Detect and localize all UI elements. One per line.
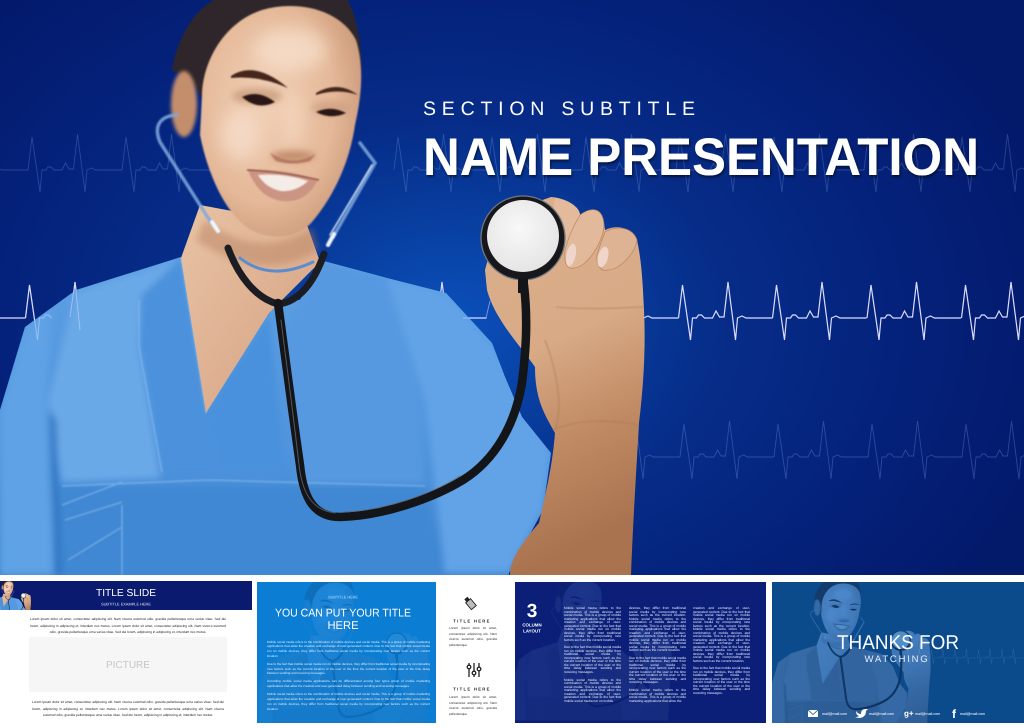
stethoscope: [157, 115, 565, 517]
thumbnail 2 body text: Mobile social media refers to the combination of mobile devices and social media. This is a group of mobile marketing applications that allow the creation and exchange of user-generated content. Due to the fact that mobile social media run on mobile devices, they differ from traditional social media by incorporating new factors such as the current location.: [267, 692, 430, 711]
thanks heading: THANKS FOR: [837, 632, 959, 654]
thumbnail 4 column 3: creation and exchange of user-generated content. Due to the fact that mobile social media run on mobile devices, they differ from traditional social media by incorporating new factors such as the current location. Mobile social media refers to the combination of mobile devices and social media. This is a group of mobile marketing applications that allow the creation and exchange of user-generated content. Due to the fact that mobile social media run on mobile devices, they differ from traditional social media by incorporating new factors such as the current location.: [693, 606, 750, 662]
thumbnail 2 body text: According mobile social media applications can be differentiated among four types group of mobile marketing applications that allow the creation and user-generated delay between sending and receiving messages.: [267, 679, 430, 688]
icon: sliders: [467, 663, 481, 677]
thumbnail 4 column 2: [629, 606, 686, 703]
slide thumbnail 3: icon list: [453, 596, 491, 692]
column layout label: [522, 622, 542, 634]
ECG line overlapping shoulder and sleeve: [26, 282, 490, 340]
slide thumbnail 2: blue title: SUBTITLE HERE: [328, 596, 358, 600]
thumbnail 3 text 2: Lorem ipsum dolor sit amet, consectetur adipiscing elit. Nam viverra euismod odio, gravida pellentesque: [449, 695, 497, 716]
contact row: [808, 707, 985, 721]
thumbnail 4 column 2: Mobile social media refers to the combination of mobile devices and social media. This is a group of mobile marketing applications that allow the: [629, 688, 686, 703]
heading 1: TITLE HERE: [453, 618, 491, 624]
thumbnail 1 upper text: Lorem ipsum dolor sit amet, consectetur adipiscing elit. Nam viverra euismod odio, gravida pellentesque urna varius vitae. Sed dui lorem, adipiscing in adipiscing et, interdum nec metus. Lorem ipsum dolor sit amet, consectetur adipiscing elit. Nam viverra euismod odio, gravida pellentesque urna varius vitae. Sed dui lorem, adipiscing in adipiscing et, interdum nec metus.: [30, 617, 226, 634]
hand and forearm: [485, 197, 645, 575]
fingers: [550, 198, 637, 270]
thumbnail 4 column 1: [564, 606, 622, 703]
picture placeholder: [29, 637, 227, 692]
hero background: [0, 0, 1024, 575]
icon: bottle: [464, 596, 476, 610]
subtitle: SECTION SUBTITLE: [423, 98, 695, 120]
thumbnail 3 text 1: Lorem ipsum dolor sit amet, consectetur adipiscing elit. Nam viverra euismod odio, gravida pellentesque: [449, 626, 497, 646]
icon: mail: [808, 710, 818, 717]
contact row: mail@mail.com: [915, 712, 940, 716]
thumbnail 2 title: HERE: [327, 620, 359, 632]
ear: [171, 71, 197, 137]
thumbnail 4 column 1: Mobile social media refers to the combination of mobile devices and social media. This is a group of mobile marketing applications that allow the creation and exchange of user-generated content. Due to the fact that mobile social media run on mobile devices, they differ from traditional social media by incorporating new factors such as the current location.: [564, 606, 621, 642]
thumbnail 1 header: [0, 581, 252, 610]
thumbnail 2 body text: Mobile social media refers to the combination of mobile devices and social media. This is a group of mobile marketing applications that allow the creation and exchange of user-generated content. Due to the fact that mobile social media run on mobile devices, they differ from traditional social media by incorporating new factors such as the current location.: [267, 640, 430, 658]
slide thumbnail 1: title slide: [0, 581, 252, 692]
thumbnail 4 column 1: Mobile social media refers to the combination of mobile devices and social media. This is a group of mobile marketing applications that allow the creation and exchange of user-generated content. Due to the fact that mobile social media run on mobile: [564, 678, 621, 703]
face: [200, 6, 361, 237]
main ECG line: [0, 282, 1024, 340]
thumbnail 4 column 3: [693, 606, 750, 695]
slide thumbnail 4: three column layout: [513, 578, 766, 723]
thumbnail 4 column 2: devices, they differ from traditional social media by incorporating new factors such as the current location. Mobile social media refers to the combination of mobile devices and social media. This is a group of mobile marketing applications that allow the creation and exchange of user-generated content. Due to the fact that mobile social media run on mobile devices, they differ from traditional social media by incorporating new factors such as the current location.: [629, 606, 686, 652]
heading 2: TITLE HERE: [453, 686, 491, 692]
thumbnail 4 column 2: Due to the fact that mobile social media run on mobile devices, they differ from traditional social media by incorporating new factors such as the current location of the user or the time the current location of the user or the time delay between sending and receiving messages.: [629, 656, 686, 684]
icon: facebook: f: [952, 707, 957, 721]
number 3: 3: [527, 601, 537, 622]
thumbnail 2 title: [275, 608, 411, 632]
icon: google plus: g+: [904, 709, 914, 718]
contact row: mail@mail.com: [960, 712, 985, 716]
thumbnail 2 title: YOU CAN PUT YOUR TITLE: [275, 608, 411, 620]
thumbnail 1 header: TITLE SLIDE: [96, 588, 156, 599]
slide thumbnail 5: thanks: [772, 581, 1024, 723]
contact row: mail@mail.com: [822, 712, 847, 716]
icon: twitter: [855, 709, 868, 718]
contact row: mail@mail.com: [869, 712, 894, 716]
picture placeholder: PICTURE: [106, 660, 150, 671]
hair: [172, 0, 361, 100]
scrubs: [0, 250, 560, 575]
thumbnail 1 lower text: Lorem ipsum dolor sit amet, consectetur adipiscing elit. Nam viverra euismod odio, gravida pellentesque urna varius vitae. Sed dui lorem, adipiscing in adipiscing et, interdum nec metus. Lorem ipsum dolor sit amet, consectetur adipiscing elit. Nam viverra euismod odio, gravida pellentesque urna varius vitae. Sed dui lorem, adipiscing in adipiscing et, interdum nec metus.: [32, 700, 224, 717]
main title: NAME PRESENTATION: [423, 128, 979, 187]
column layout label: COLUMN: [522, 622, 542, 628]
thumbnail 2 body text: Due to the fact that mobile social media run on mobile devices, they differ from traditional social media by incorporating new factors such as the current location of the user or the time the current location of the user or the time delay between sending and receiving messages.: [267, 662, 430, 675]
slide thumbnail 2: blue title: [257, 580, 436, 728]
thumbnail 4 column 3: Due to the fact that mobile social media run on mobile devices, they differ from traditional social media by incorporating new factors such as the current location of the user or the time the current location of the user or the time delay between sending and receiving messages.: [693, 666, 750, 695]
watching subheading: WATCHING: [864, 654, 930, 665]
neck and chest skin: [181, 205, 320, 413]
column layout label: LAYOUT: [523, 628, 541, 634]
thumbnail 4 column 1: Due to the fact that mobile social media run on mobile devices, they differ from traditional social media by incorporating new factors such as the current location of the user or the time the current location of the user or the time delay between sending and receiving messages.: [564, 645, 621, 674]
thumbnail 1 header: SUBTITLE EXAMPLE HERE: [101, 602, 151, 606]
thumbnail 2 body text: [267, 640, 430, 711]
faint upper ECG line: [0, 134, 1024, 192]
faint lower ECG line: [586, 421, 1024, 479]
nurse figure: [0, 0, 645, 575]
